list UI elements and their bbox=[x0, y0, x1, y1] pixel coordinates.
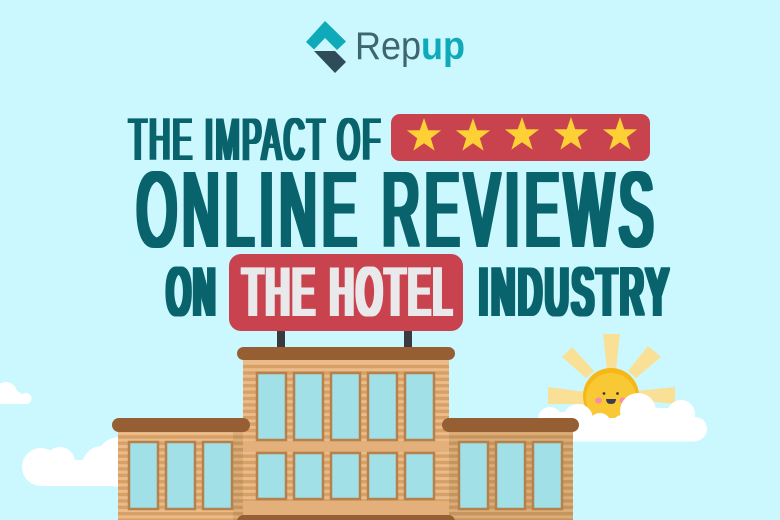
logo: Repup bbox=[306, 21, 465, 73]
left wing bbox=[118, 432, 243, 520]
far-left cloud bbox=[0, 382, 32, 404]
hotel sign posts bbox=[277, 330, 412, 348]
right wing roof bbox=[442, 418, 579, 432]
entrance canopy bbox=[237, 515, 455, 520]
sun face details bbox=[595, 392, 626, 404]
left wing roof bbox=[112, 418, 250, 432]
title word: on: ON bbox=[167, 254, 215, 331]
rating banner with five stars bbox=[391, 114, 650, 161]
centre roof bbox=[237, 347, 455, 360]
right cloud bbox=[538, 393, 707, 442]
centre block bbox=[243, 360, 449, 520]
left cloud bbox=[22, 437, 145, 487]
right wing bbox=[449, 432, 573, 520]
hotel sign: THE HOTEL bbox=[243, 255, 451, 330]
sun rays bbox=[548, 334, 675, 404]
hotel building bbox=[112, 347, 579, 520]
title line: the impact of: THE IMPACT OF bbox=[129, 105, 380, 173]
title line: online reviews: ONLINE REVIEWS bbox=[137, 150, 653, 269]
title word: industry: INDUSTRY bbox=[479, 255, 668, 330]
logo wordmark: Repup bbox=[355, 25, 465, 68]
sun face disc bbox=[583, 368, 639, 424]
logo icon bbox=[306, 21, 346, 73]
sun bbox=[548, 334, 675, 424]
